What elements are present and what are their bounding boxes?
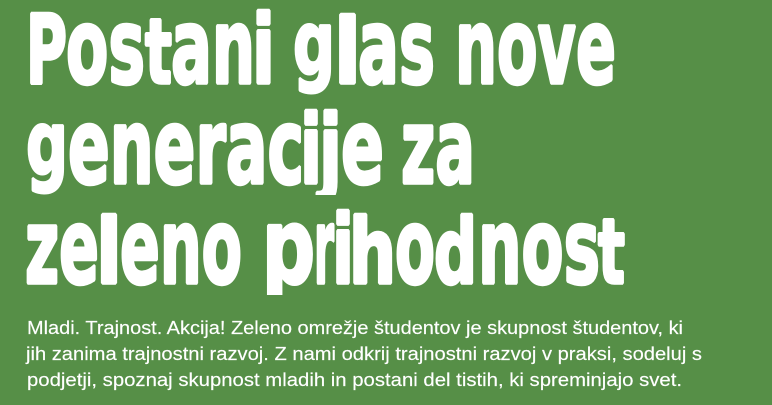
title: l <box>334 0 361 105</box>
title: l <box>96 200 122 305</box>
title: enerac <box>68 86 304 208</box>
title: eno <box>120 186 242 308</box>
title: j <box>316 96 342 206</box>
title: i <box>300 96 322 206</box>
intro paragraph: podjetji, spoznaj skupnost mladih in postani del tistih, ki spreminjajo svet. <box>27 370 682 390</box>
title: g <box>26 92 68 195</box>
title: ze <box>25 186 99 308</box>
intro paragraph: jih zanima trajnostni razvoj. Z nami odkrij trajnostni razvoj v praksi, sodeluj s <box>25 344 702 364</box>
title: d <box>434 200 477 305</box>
intro paragraph <box>25 318 702 390</box>
title: nos <box>478 186 600 308</box>
title <box>25 0 625 308</box>
title: i <box>332 196 354 306</box>
title: e <box>341 86 384 208</box>
title: r <box>314 186 334 308</box>
title: h <box>349 200 396 305</box>
title: t <box>598 200 625 305</box>
title: p <box>262 186 315 308</box>
title: t <box>145 0 172 105</box>
title: za <box>401 86 475 208</box>
intro paragraph: Mladi. Trajnost. Akcija! Zeleno omrežje študentov je skupnost študentov, ki <box>27 318 683 338</box>
title: o <box>395 186 435 308</box>
